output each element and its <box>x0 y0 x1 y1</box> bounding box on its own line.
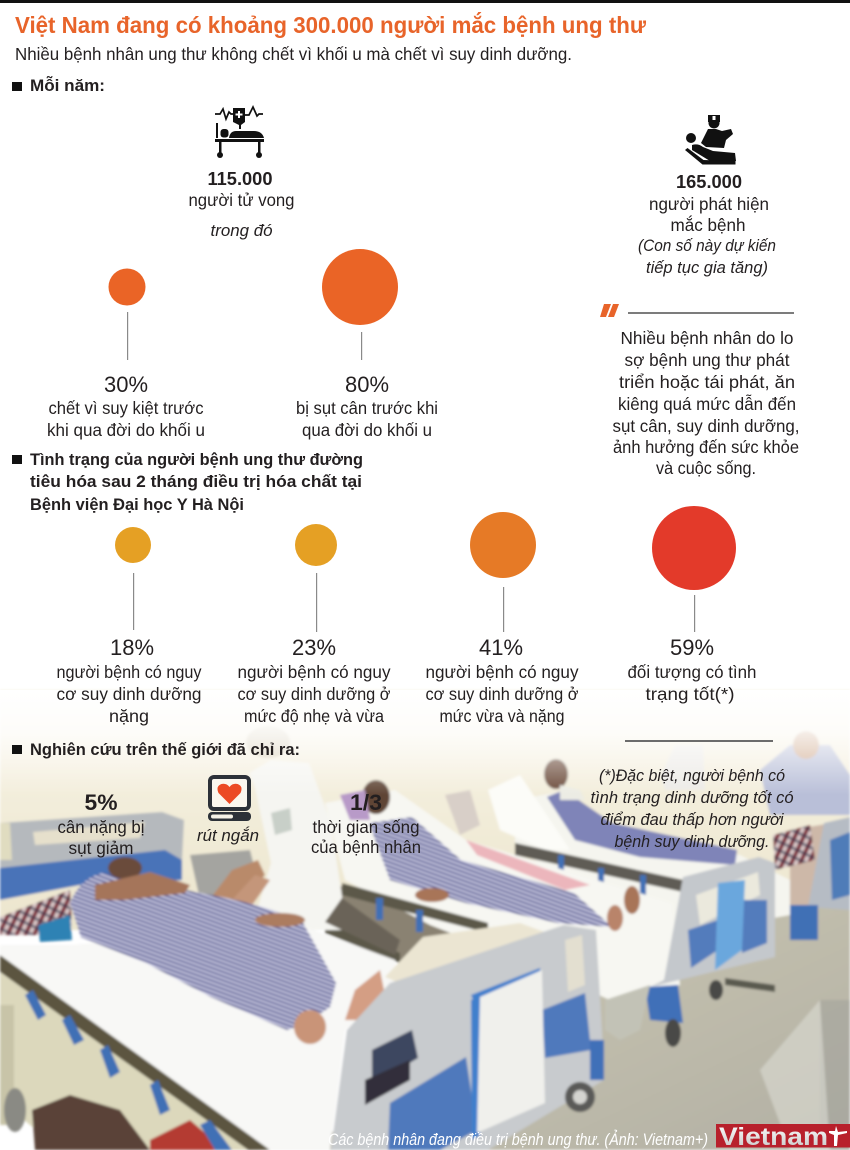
stat: 59%: đối tượng có tình <box>628 662 756 682</box>
title: Việt Nam đang có khoảng 300.000 người mắc bệnh ung thư <box>15 11 646 38</box>
stat: 115.000 deaths: 115.000 <box>208 169 272 189</box>
quote rule <box>628 312 794 314</box>
icon: monitor with heart <box>208 777 251 821</box>
stat: 18%: người bệnh có nguy <box>56 662 202 682</box>
stat: 165.000 new cases: người phát hiện <box>649 194 769 214</box>
circle: 18% <box>115 527 151 563</box>
stat: 23%: cơ suy dinh dưỡng ở <box>238 684 390 704</box>
pointer line 23% <box>316 573 317 632</box>
stat: 5% weight loss: sụt giảm <box>68 838 134 858</box>
heading: nghiên cứu: Nghiên cứu trên thế giới đã chỉ ra: <box>30 741 300 759</box>
icon: hospital bed <box>215 107 264 158</box>
middle patient <box>369 817 612 927</box>
stat: 30%: khi qua đời do khối u <box>47 420 205 440</box>
right footboard <box>650 857 775 987</box>
stat: 165.000 new cases: tiếp tục gia tăng) <box>646 259 768 277</box>
label: rút ngắn: rút ngắn <box>197 826 259 845</box>
footnote <box>590 767 794 851</box>
stat: 23%: mức độ nhẹ và vừa <box>244 706 384 726</box>
subtitle: Nhiều bệnh nhân ung thư không chết vì khối u mà chết vì suy dinh dưỡng. <box>15 44 572 64</box>
circle: 80% <box>322 249 398 325</box>
circle: 23% <box>295 524 337 566</box>
icon: quotation mark <box>600 304 619 317</box>
heading: mỗi năm: Mỗi năm: <box>30 76 105 95</box>
footnote: bệnh suy dinh dưỡng. <box>614 833 770 851</box>
stat: 41%: 41% <box>479 635 523 660</box>
stat: 115.000 deaths <box>188 169 294 240</box>
stat: 59% <box>628 635 756 704</box>
circle: 41% <box>470 512 536 578</box>
blanket <box>385 923 585 997</box>
stat: 30% <box>47 372 205 440</box>
stat: 80%: bị sụt cân trước khi <box>296 398 438 418</box>
pointer line 80% <box>361 332 362 360</box>
top fade <box>0 690 850 795</box>
stat: 18%: 18% <box>110 635 154 660</box>
middle bed sheet <box>325 790 680 1000</box>
stat: 5% weight loss: cân nặng bị <box>58 817 144 837</box>
stat: 1/3 life time: thời gian sống <box>312 817 420 837</box>
footnote rule <box>625 740 773 742</box>
far nurses <box>760 745 850 815</box>
quote text: và cuộc sống. <box>656 458 756 478</box>
stat: 30%: 30% <box>104 372 148 397</box>
stat: 41%: mức vừa và nặng <box>440 706 564 726</box>
stat: 5% weight loss: 5% <box>84 790 118 815</box>
circle: 30% <box>108 268 146 306</box>
right bed sheet and pillow <box>515 790 790 935</box>
middle bed base <box>190 850 260 900</box>
stat: 41% <box>426 635 579 726</box>
stat: 23%: 23% <box>292 635 336 660</box>
stat: 80% <box>296 372 438 440</box>
stat: 1/3 life time: của bệnh nhân <box>311 837 421 857</box>
stat: 18%: cơ suy dinh dưỡng <box>56 684 202 704</box>
stat: 23% <box>238 635 391 726</box>
footnote: tình trạng dinh dưỡng tốt có <box>590 789 794 807</box>
stat: 59%: 59% <box>670 635 714 660</box>
quote text: ảnh hưởng đến sức khỏe <box>613 437 799 457</box>
quote text <box>612 328 800 478</box>
left bed sheet <box>0 925 395 1150</box>
footnote: điểm đau thấp hơn người <box>600 811 785 829</box>
stat: 23%: người bệnh có nguy <box>238 662 391 682</box>
stat: 5% weight loss <box>58 790 144 858</box>
stat: 1/3 life time: 1/3 <box>350 790 382 815</box>
quote text: kiêng quá mức dẫn đến <box>618 393 796 414</box>
heading: tình trạng người bệnh: Tình trạng của người bệnh ung thư đường <box>30 451 363 469</box>
pointer line 59% <box>694 595 695 632</box>
left patient <box>70 873 336 1030</box>
stat: 41%: cơ suy dinh dưỡng ở <box>426 684 578 704</box>
pointer line 30% <box>127 312 128 360</box>
quote text: sụt cân, suy dinh dưỡng, <box>612 416 800 436</box>
footnote: (*)Đặc biệt, người bệnh có <box>599 767 785 785</box>
stat: 18% <box>56 635 202 726</box>
pillow <box>0 890 72 935</box>
heading: tình trạng người bệnh: tiêu hóa sau 2 tháng điều trị hóa chất tại <box>30 473 362 491</box>
stat: 80%: 80% <box>345 372 389 397</box>
pointer line 18% <box>133 573 134 630</box>
stat: 165.000 new cases: (Con số này dự kiến <box>638 237 776 255</box>
stat: 115.000 deaths: trong đó <box>210 222 272 240</box>
heading: tình trạng người bệnh: Bệnh viện Đại học Y Hà Nội <box>30 496 244 514</box>
stat: 115.000 deaths: người tử vong <box>188 190 294 210</box>
stat: 59%: trạng tốt(*) <box>646 684 734 704</box>
stat: 165.000 new cases <box>638 172 776 277</box>
stat: 30%: chết vì suy kiệt trước <box>48 398 204 418</box>
quote text: Nhiều bệnh nhân do lo <box>620 328 794 348</box>
top bar <box>0 0 850 3</box>
stat: 41%: người bệnh có nguy <box>426 662 579 682</box>
stat: 80%: qua đời do khối u <box>302 420 432 440</box>
right patient <box>547 790 737 865</box>
left headboard <box>0 812 184 890</box>
heading: tình trạng người bệnh <box>12 451 363 514</box>
quote text: triển hoặc tái phát, ăn <box>619 372 795 392</box>
stat: 165.000 new cases: mắc bệnh <box>670 214 746 235</box>
stat: 1/3 life time <box>311 790 421 857</box>
icon: doctor examining patient <box>685 115 736 164</box>
photo caption: Các bệnh nhân đang điều trị bệnh ung thư. (Ảnh: Vietnam+) <box>328 1130 708 1149</box>
photo: patients in hospital ward <box>0 690 850 1150</box>
quote text: sợ bệnh ung thư phát <box>624 350 790 370</box>
stat: 18%: nặng <box>109 706 149 726</box>
stat: 165.000 new cases: 165.000 <box>676 172 742 192</box>
front footboard <box>331 925 604 1150</box>
pointer line 41% <box>503 587 504 632</box>
far right footboard <box>790 820 850 915</box>
nurse <box>249 760 347 930</box>
circle: 59% <box>652 506 736 590</box>
